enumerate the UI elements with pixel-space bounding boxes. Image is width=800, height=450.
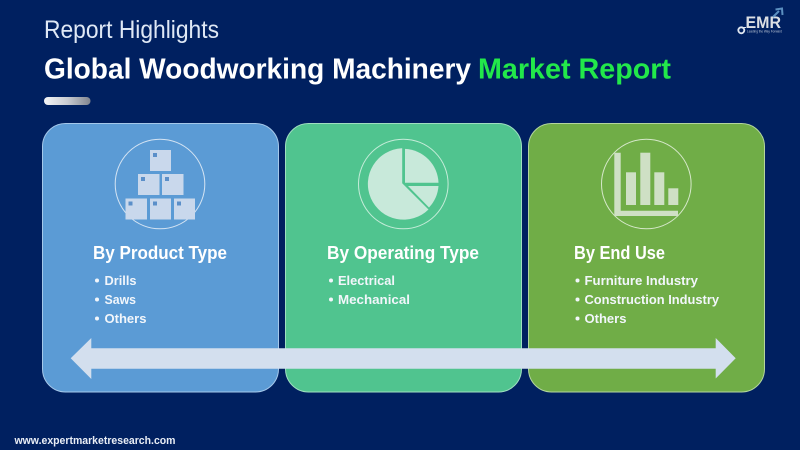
heading: By End Use: By End Use — [574, 243, 665, 263]
list: product types: Saws — [104, 292, 136, 307]
panel: by end use — [528, 124, 764, 392]
list: product types — [95, 273, 146, 326]
title accent pill — [44, 97, 90, 105]
subtitle: Report Highlights: Report Highlights — [44, 16, 219, 44]
list: operating types: Electrical — [338, 273, 395, 288]
logo: EMR — [738, 8, 782, 34]
logo: EMR: Leading the Way Forward — [747, 30, 782, 34]
list: end uses: Furniture Industry — [584, 273, 699, 288]
icon: stacked boxes — [115, 139, 205, 229]
list: end uses: Construction Industry — [584, 292, 720, 307]
panel: by operating type — [286, 124, 522, 392]
logo: EMR: EMR — [746, 14, 781, 32]
list: product types: Others — [104, 311, 146, 326]
footer: website: www.expertmarketresearch.com — [14, 435, 176, 447]
icon: pie chart — [358, 139, 448, 229]
list: end uses: Others — [584, 311, 626, 326]
list: end uses — [576, 273, 720, 326]
title: Global Woodworking Machinery — [44, 54, 471, 86]
heading: By Product Type: By Product Type — [93, 243, 227, 263]
arrow: double-headed — [71, 338, 736, 379]
title: Market Report — [478, 54, 671, 86]
list: operating types: Mechanical — [338, 292, 410, 307]
heading: By Operating Type: By Operating Type — [327, 243, 479, 263]
list: operating types — [329, 273, 410, 307]
list: product types: Drills — [104, 273, 136, 288]
panel: by product type — [42, 124, 278, 392]
icon: bar chart — [602, 139, 691, 229]
